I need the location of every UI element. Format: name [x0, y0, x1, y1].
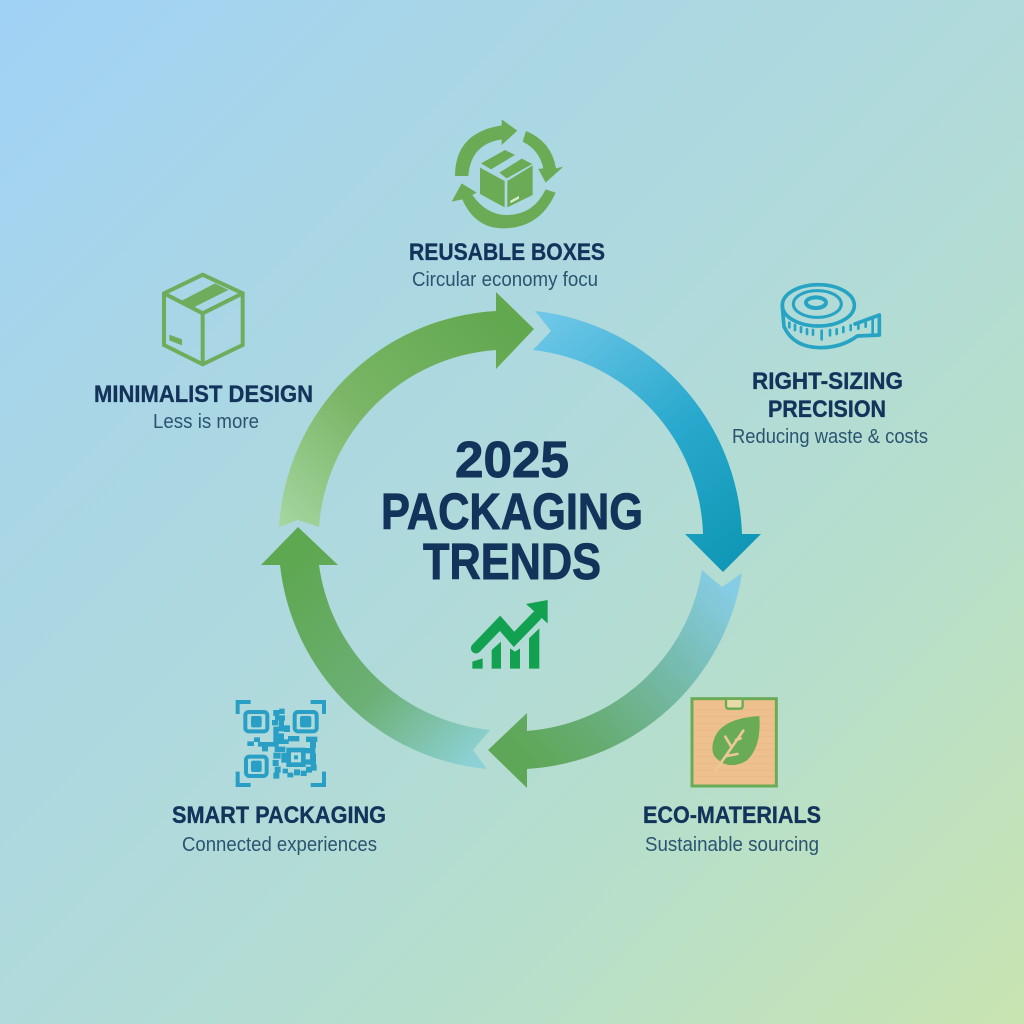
- subtitle: Less is more: [153, 411, 259, 433]
- icon: growth chart: [472, 600, 548, 669]
- heading line 1: RIGHT-SIZING: [752, 368, 903, 395]
- title: [381, 431, 643, 590]
- title: 2025: [455, 431, 569, 488]
- icon: outlined box: [164, 275, 243, 364]
- icon: cardboard with leaf: [692, 699, 776, 786]
- heading: ECO-MATERIALS: [643, 802, 821, 829]
- cycle diagram: [261, 292, 761, 788]
- heading: REUSABLE BOXES: [409, 239, 605, 266]
- heading: SMART PACKAGING: [172, 802, 386, 829]
- arrow: reusable boxes to right-sizing: [533, 311, 761, 572]
- subtitle: Circular economy focu: [412, 269, 598, 291]
- panel: smart packaging: [172, 702, 386, 856]
- title: PACKAGING: [381, 483, 643, 540]
- panel: eco-materials: [643, 699, 821, 856]
- subtitle: Connected experiences: [182, 834, 377, 856]
- icon: measuring tape: [782, 285, 879, 348]
- heading line 2: PRECISION: [768, 396, 886, 423]
- panel: right-sizing precision: [732, 285, 928, 448]
- icon: box with circular arrows: [452, 119, 563, 228]
- panel: minimalist design: [94, 275, 313, 433]
- heading: MINIMALIST DESIGN: [94, 381, 313, 408]
- arrow: right-sizing to eco-materials: [488, 570, 742, 788]
- title: TRENDS: [423, 533, 601, 590]
- arrow: minimalist design to reusable boxes: [279, 292, 534, 527]
- icon: QR code: [238, 702, 324, 785]
- arrow: eco-materials to smart packaging: [261, 527, 490, 769]
- panel: reusable boxes: [409, 119, 605, 291]
- subtitle: Reducing waste & costs: [732, 426, 928, 448]
- subtitle: Sustainable sourcing: [645, 834, 819, 856]
